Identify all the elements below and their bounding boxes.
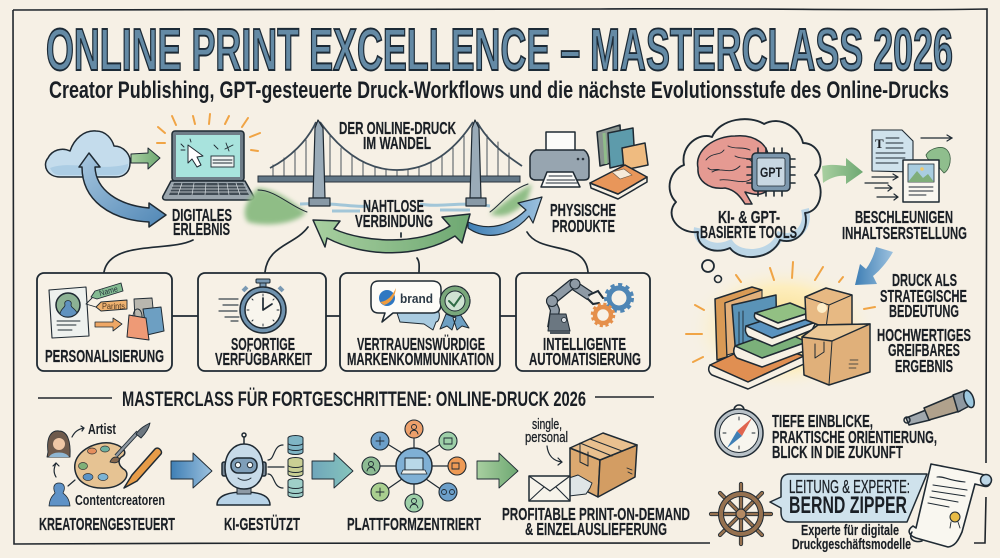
label: physical products: PHYSISCHE xyxy=(550,200,616,220)
icon: hand xyxy=(569,475,592,496)
arrow: step 3 to 4 xyxy=(477,453,518,488)
step: creator driven xyxy=(39,422,175,534)
icon: rosette xyxy=(440,286,470,330)
icon: palette xyxy=(75,443,127,488)
step: AI supported xyxy=(217,433,303,534)
icon: books xyxy=(590,125,648,199)
label: insights xyxy=(772,411,937,462)
label: expert description: Experte für digitale xyxy=(801,522,899,539)
icon: glow and rays xyxy=(686,262,876,392)
icon: name tags xyxy=(86,283,127,311)
icon: brand speech bubble: brand xyxy=(400,291,433,306)
connectors xyxy=(104,227,588,316)
icon: name tags: Name xyxy=(98,284,119,298)
label: physical products xyxy=(550,200,616,236)
step: print on demand: single, xyxy=(532,416,562,433)
icon: compass xyxy=(715,405,763,457)
arrow: step 2 to 3 xyxy=(312,453,353,488)
panel: Intelligente Automatisierung: INTELLIGENTE xyxy=(543,334,626,354)
step: print on demand: PROFITABLE PRINT-ON-DEMAND xyxy=(502,504,690,524)
icon: certificate scroll xyxy=(909,464,992,547)
icon: network nodes xyxy=(362,420,466,512)
icon: bridge xyxy=(245,120,532,224)
panel: Intelligente Automatisierung: AUTOMATISIERUNG xyxy=(529,349,641,369)
icon: GPT chip: GPT xyxy=(760,164,782,180)
panel: Sofortige Verfügbarkeit: VERFÜGBARKEIT xyxy=(215,349,312,369)
panel: Vertrauenswürdige Markenkommunikation: MARKENKOMMUNIKATION xyxy=(347,349,494,369)
icon: brain xyxy=(698,136,768,204)
step: platform centric: PLATTFORMZENTRIERT xyxy=(347,514,481,534)
icon: profile card xyxy=(49,287,89,338)
icon: artist xyxy=(47,431,70,457)
icon: GPT chip xyxy=(747,148,795,196)
label: tangible result xyxy=(877,325,971,376)
icon: laptop xyxy=(157,114,260,200)
label: expert description: Druckgeschäftsmodelle xyxy=(792,536,911,553)
label: physical products: PRODUKTE xyxy=(552,216,615,236)
arrow: green double arrow xyxy=(313,214,470,253)
callout: speaker: LEITUNG & EXPERTE: xyxy=(789,477,910,497)
step: print on demand xyxy=(502,416,690,539)
label: seamless connection xyxy=(355,196,433,231)
label: strategic importance: BEDEUTUNG xyxy=(889,301,959,321)
label: digital experience: DIGITALES xyxy=(172,205,232,225)
panel: Intelligente Automatisierung xyxy=(516,273,650,371)
arrow: tools to content xyxy=(822,158,863,184)
arrow: cloud to laptop xyxy=(131,148,160,169)
arrow: orange xyxy=(95,318,122,331)
icon: stopwatch xyxy=(219,279,286,333)
label: expert description xyxy=(792,522,911,553)
icon: robot arm xyxy=(546,279,603,334)
panel: Sofortige Verfügbarkeit xyxy=(198,273,326,371)
icon: envelope xyxy=(529,476,570,501)
step: print on demand: personal xyxy=(525,429,568,446)
label: seamless connection: VERBINDUNG xyxy=(355,211,433,231)
label: seamless connection: NAHTLOSE xyxy=(363,196,424,216)
arrow: step 1 to 2 xyxy=(171,453,212,488)
step: AI supported: KI-GESTÜTZT xyxy=(224,514,300,534)
icon: thought cloud: BASIERTE TOOLS xyxy=(700,222,797,242)
step: platform centric xyxy=(347,420,481,534)
icon: creator person xyxy=(49,483,70,506)
step: creator driven: Artist xyxy=(88,422,116,438)
icon: thought cloud: KI- & GPT- xyxy=(718,207,780,227)
label: insights: BLICK IN DIE ZUKUNFT xyxy=(772,442,903,462)
label: insights: TIEFE EINBLICKE, xyxy=(772,411,873,431)
callout: speaker: BERND ZIPPER xyxy=(789,492,907,519)
icon: cardboard boxes xyxy=(802,288,870,385)
panel: Vertrauenswürdige Markenkommunikation xyxy=(340,273,500,371)
label: bridge heading: DER ONLINE-DRUCK xyxy=(339,118,456,138)
label: digital experience xyxy=(172,205,232,239)
panel: Personalisierung: PERSONALISIERUNG xyxy=(45,346,164,366)
panel: Vertrauenswürdige Markenkommunikation: VERTRAUENSWÜRDIGE xyxy=(357,334,485,354)
icon: book stack xyxy=(709,287,816,389)
icon: pencil xyxy=(124,448,161,488)
icon: robot xyxy=(217,433,270,505)
callout: speaker xyxy=(770,474,927,522)
label: digital experience: ERLEBNIS xyxy=(173,219,230,239)
panel: Personalisierung xyxy=(37,273,172,371)
arrow: blue to physical products xyxy=(468,197,542,235)
arrow: cloud to digital experience xyxy=(79,153,166,227)
icon: printer xyxy=(530,132,589,187)
step: print on demand: & EINZELAUSLIEFERUNG xyxy=(525,519,667,539)
icon: shopping bags xyxy=(127,298,164,340)
step: creator driven: KREATORENGESTEUERT xyxy=(39,514,175,534)
step: creator driven: Contentcreatoren xyxy=(75,493,165,509)
label: accelerate content creation xyxy=(842,207,967,243)
icon: documents: T xyxy=(875,136,884,151)
section heading: MASTERCLASS FÜR FORTGESCHRITTENE: ONLINE-DRUCK 2026 xyxy=(122,388,586,411)
label: strategic importance xyxy=(880,270,967,321)
icon: paintbrush xyxy=(110,423,150,463)
label: tangible result: ERGEBNIS xyxy=(895,356,953,376)
label: bridge heading: IM WANDEL xyxy=(363,133,431,153)
label: tangible result: GREIFBARES xyxy=(888,340,960,360)
panel: Sofortige Verfügbarkeit: SOFORTIGE xyxy=(231,334,295,354)
label: strategic importance: DRUCK ALS xyxy=(892,270,957,290)
icon: cloud xyxy=(45,131,130,177)
icon: gears xyxy=(592,285,632,326)
arrow: blue down xyxy=(855,247,893,285)
icon: name tags: Parints xyxy=(102,302,125,311)
icon: brand speech bubble xyxy=(371,281,441,330)
icon: thought cloud xyxy=(670,119,821,282)
icon: databases xyxy=(268,436,303,498)
icon: ship wheel xyxy=(711,484,771,544)
label: bridge heading xyxy=(339,118,456,153)
icon: parcel xyxy=(570,433,637,497)
icon: documents xyxy=(865,130,952,202)
icon: spyglass xyxy=(904,389,976,425)
icon: platform hub xyxy=(396,448,432,484)
